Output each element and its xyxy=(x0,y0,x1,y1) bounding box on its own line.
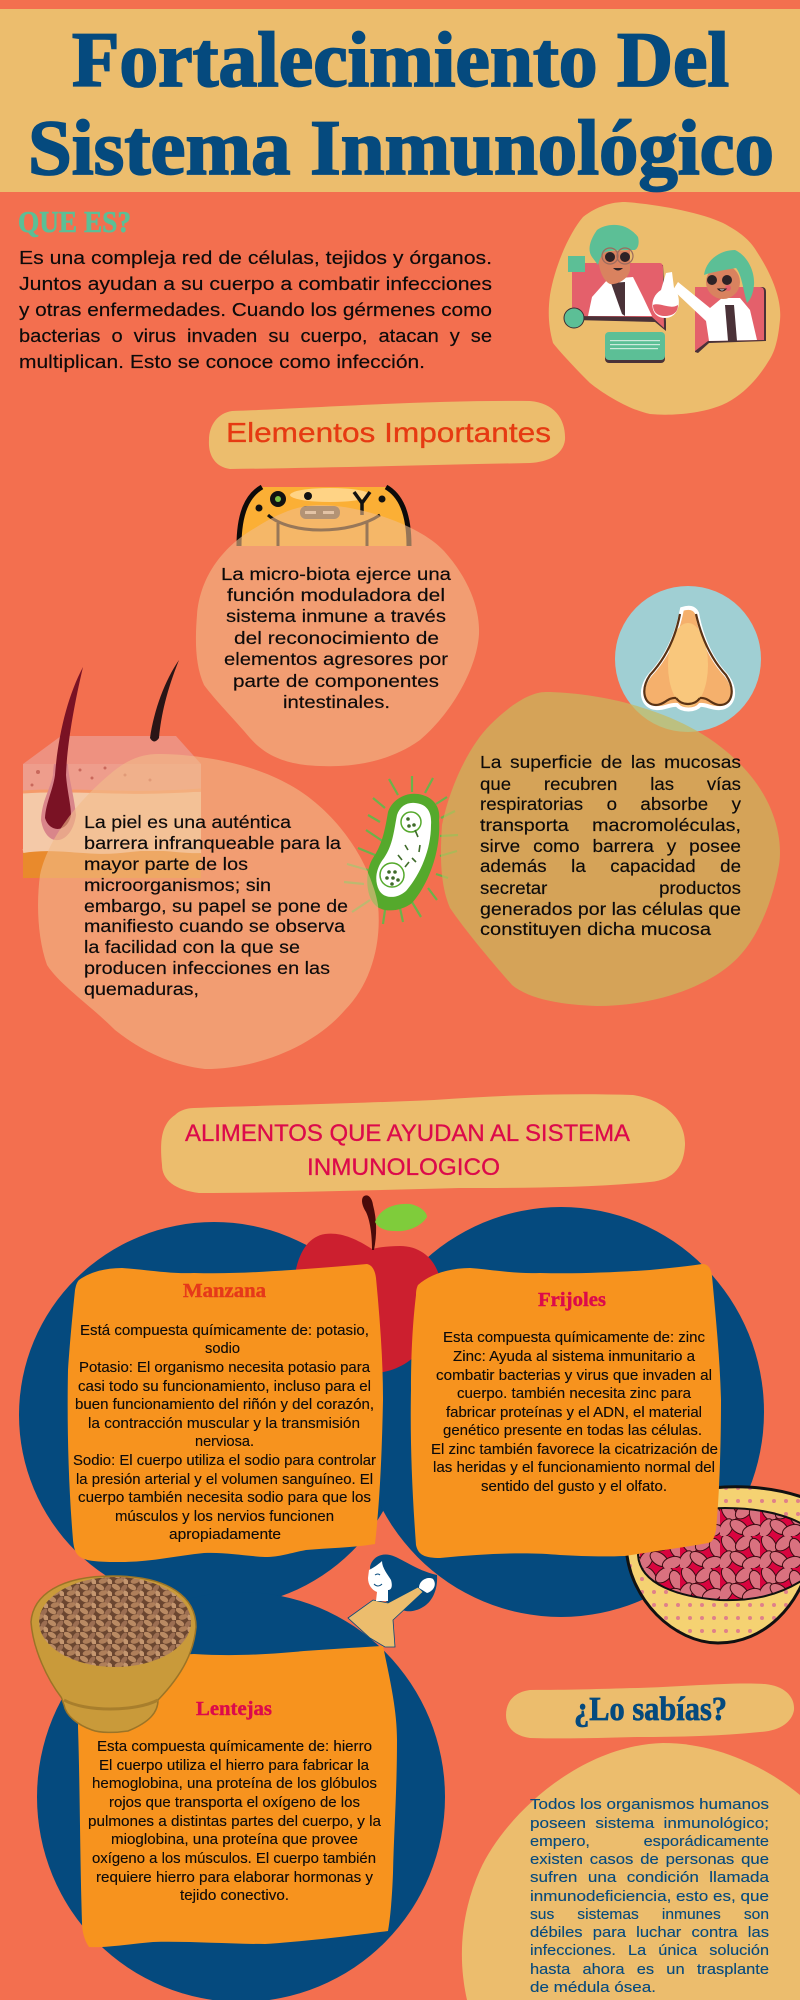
text block: definition: multiplican. Esto se conoce como infección. xyxy=(19,351,425,372)
manzana heading: Manzana xyxy=(183,1280,266,1302)
sabias text: sus sistemas inmunes son xyxy=(530,1906,769,1923)
panel: microbiota xyxy=(196,505,479,766)
sabias text: infecciones. La única solución xyxy=(530,1942,769,1959)
manzana text: casi todo su funcionamiento, incluso para el xyxy=(78,1379,371,1395)
microbiota text: La micro-biota ejerce una xyxy=(221,564,451,584)
manzana text: la contracción muscular y la transmisión xyxy=(88,1416,360,1432)
microbiota text: elementos agresores por xyxy=(224,649,448,669)
title text: Fortalecimiento Del xyxy=(72,16,729,103)
panel: skin xyxy=(38,754,379,1069)
yellow blob xyxy=(549,202,780,415)
manzana text: músculos y los nervios funcionen xyxy=(115,1509,334,1525)
lentejas text: pulmones a distintas partes del cuerpo, y la xyxy=(88,1814,382,1830)
sabias text: de médula ósea. xyxy=(530,1979,656,1996)
panel: manzana xyxy=(68,1264,383,1562)
green icons xyxy=(564,256,665,363)
manzana text: cuerpo también necesita sodio para que los xyxy=(78,1490,371,1506)
panel: lentejas xyxy=(78,1646,397,1947)
mucosa text: generados por las células que xyxy=(480,899,741,919)
skin text: producen infecciones en las xyxy=(84,958,330,978)
icon: bacterium xyxy=(344,776,458,924)
frijoles text: genético presente en todas las células. xyxy=(443,1423,702,1439)
doctor woman xyxy=(673,250,766,353)
title text: Sistema Inmunológico xyxy=(28,104,774,191)
manzana text: la presión arterial y el volumen sanguíneo. El xyxy=(76,1472,373,1488)
heading pill: alimentos: INMUNOLOGICO xyxy=(307,1154,500,1181)
mucosa text: sirve como barrera y posee xyxy=(480,836,741,856)
title text xyxy=(28,16,774,191)
text block: definition: Es una compleja red de células, tejidos y órganos. xyxy=(19,247,492,268)
frijoles text: sentido del gusto y el olfato. xyxy=(481,1479,667,1495)
lentejas text: requiere hierro para elaborar hormonas y xyxy=(96,1870,374,1886)
heading pill: alimentos xyxy=(161,1094,685,1193)
heading pill: lo sabias xyxy=(506,1684,794,1738)
icon: lentils bowl xyxy=(31,1576,196,1732)
orange card xyxy=(78,1646,397,1947)
lentejas text xyxy=(88,1739,382,1904)
icon: beans bowl xyxy=(626,1487,800,1643)
mucosa text: respiratorias o absorbe y xyxy=(480,794,741,814)
heading pill: alimentos: ALIMENTOS QUE AYUDAN AL SISTEMA xyxy=(185,1120,630,1147)
mucosa text: secretar productos xyxy=(480,878,741,898)
skin text: manifiesto cuando se observa xyxy=(84,916,345,936)
orange card xyxy=(411,1264,721,1558)
heading pill: elementos importantes xyxy=(209,401,565,469)
microbiota text: parte de componentes xyxy=(233,671,439,691)
manzana text: apropiadamente xyxy=(169,1527,281,1543)
frijoles text: las heridas y el funcionamiento normal del xyxy=(433,1460,715,1476)
microbiota text: función moduladora del xyxy=(227,585,445,605)
sabias text: Todos los organismos humanos xyxy=(530,1796,769,1813)
icon: nose xyxy=(615,586,761,732)
panel: mucosa xyxy=(441,692,780,1006)
lentejas text: Esta compuesta químicamente de: hierro xyxy=(97,1739,372,1755)
manzana text: Sodio: El cuerpo utiliza el sodio para controlar xyxy=(73,1453,376,1469)
frijoles text: combatir bacterias y virus que invaden al xyxy=(436,1368,712,1384)
lentejas text: hemoglobina, una proteína de los glóbulos xyxy=(92,1776,377,1792)
lentejas heading: Lentejas xyxy=(196,1698,272,1720)
sabias text: poseen sistema inmunológico; xyxy=(530,1815,769,1832)
text block: definition: bacterias o virus invaden su cuerpo, atacan y se xyxy=(19,325,492,346)
heading pill: lo sabias: ¿Lo sabías? xyxy=(574,1691,727,1728)
mucosa text xyxy=(480,752,741,939)
lentejas text: rojos que transporta el oxígeno de los xyxy=(109,1795,360,1811)
blob xyxy=(38,754,379,1069)
icon: skin with hair xyxy=(23,660,201,878)
icon: girl xyxy=(348,1555,437,1647)
icon: intestine xyxy=(239,487,409,546)
skin text: La piel es una auténtica xyxy=(84,812,291,832)
frijoles text: Esta compuesta químicamente de: zinc xyxy=(443,1330,705,1346)
heading pill: elementos importantes: Elementos Importantes xyxy=(226,417,551,448)
panel: frijoles xyxy=(411,1264,721,1558)
skin text: barrera infranqueable para la xyxy=(84,833,341,853)
microbiota text: del reconocimiento de xyxy=(234,628,439,648)
sabias text: sufren una condición llamada xyxy=(530,1869,770,1886)
lentejas text: mioglobina, una proteína que provee xyxy=(111,1832,358,1848)
mucosa text: transporta macromoléculas, xyxy=(480,815,741,835)
manzana text: buen funcionamiento del riñón y del corazón, xyxy=(75,1397,374,1413)
skin text: embargo, su papel se pone de xyxy=(84,896,348,916)
doctor man xyxy=(572,225,666,331)
text block: definition: Juntos ayudan a su cuerpo a combatir infecciones xyxy=(19,273,492,294)
frijoles text: fabricar proteínas y el ADN, el material xyxy=(446,1405,702,1421)
panel: lo sabias xyxy=(462,1743,800,2000)
sabias text: empero, esporádicamente xyxy=(530,1833,769,1850)
text block: definition: y otras enfermedades. Cuando los gérmenes como xyxy=(19,299,492,320)
skin text: microorganismos; sin xyxy=(84,875,271,895)
sabias text: débiles para luchar contra las xyxy=(530,1924,769,1941)
lentejas text: tejido conectivo. xyxy=(180,1888,289,1904)
frijoles text: El zinc también favorece la cicatrización de xyxy=(431,1442,718,1458)
blob xyxy=(441,692,780,1006)
blob xyxy=(196,505,479,766)
blue circle: lentejas xyxy=(37,1592,445,2000)
text block: definition xyxy=(19,247,492,372)
mucosa text: constituyen dicha mucosa xyxy=(480,919,711,939)
frijoles text: Zinc: Ayuda al sistema inmunitario a xyxy=(453,1349,696,1365)
sabias text: inmunodeficiencia, esto es, que xyxy=(530,1888,769,1905)
sabias text: hasta ahora es un trasplante xyxy=(530,1961,769,1978)
manzana text: nerviosa. xyxy=(195,1434,254,1450)
manzana text: Está compuesta químicamente de: potasio, xyxy=(80,1323,369,1339)
illustration: doctors on yellow blob xyxy=(549,202,780,415)
frijoles text: cuerpo. también necesita zinc para xyxy=(457,1386,692,1402)
blob xyxy=(462,1743,800,2000)
sabias text xyxy=(530,1796,770,1996)
blue circles xyxy=(19,1207,764,1617)
microbiota text: intestinales. xyxy=(283,692,390,712)
skin text: la facilidad con la que se xyxy=(84,937,300,957)
lentejas text: oxígeno a los músculos. El cuerpo también xyxy=(92,1851,376,1867)
flask xyxy=(652,272,679,318)
icon: apple xyxy=(293,1195,441,1373)
heading: que es: QUE ES? xyxy=(18,204,131,239)
orange card xyxy=(68,1264,383,1562)
skin text xyxy=(84,812,348,999)
frijoles text xyxy=(431,1330,718,1495)
manzana text xyxy=(73,1323,376,1543)
title banner xyxy=(0,9,800,192)
lentejas text: El cuerpo utiliza el hierro para fabricar la xyxy=(99,1758,370,1774)
skin text: quemaduras, xyxy=(84,979,199,999)
frijoles heading: Frijoles xyxy=(538,1289,606,1311)
manzana text: sodio xyxy=(205,1341,240,1357)
mucosa text: La superficie de las mucosas xyxy=(480,752,741,772)
mucosa text: que recubren las vías xyxy=(480,774,741,794)
microbiota text xyxy=(221,564,451,712)
manzana text: Potasio: El organismo necesita potasio para xyxy=(79,1360,371,1376)
mucosa text: además la capacidad de xyxy=(480,856,741,876)
sabias text: existen casos de personas que xyxy=(530,1851,769,1868)
microbiota text: sistema inmune a través xyxy=(226,606,446,626)
skin text: mayor parte de los xyxy=(84,854,248,874)
